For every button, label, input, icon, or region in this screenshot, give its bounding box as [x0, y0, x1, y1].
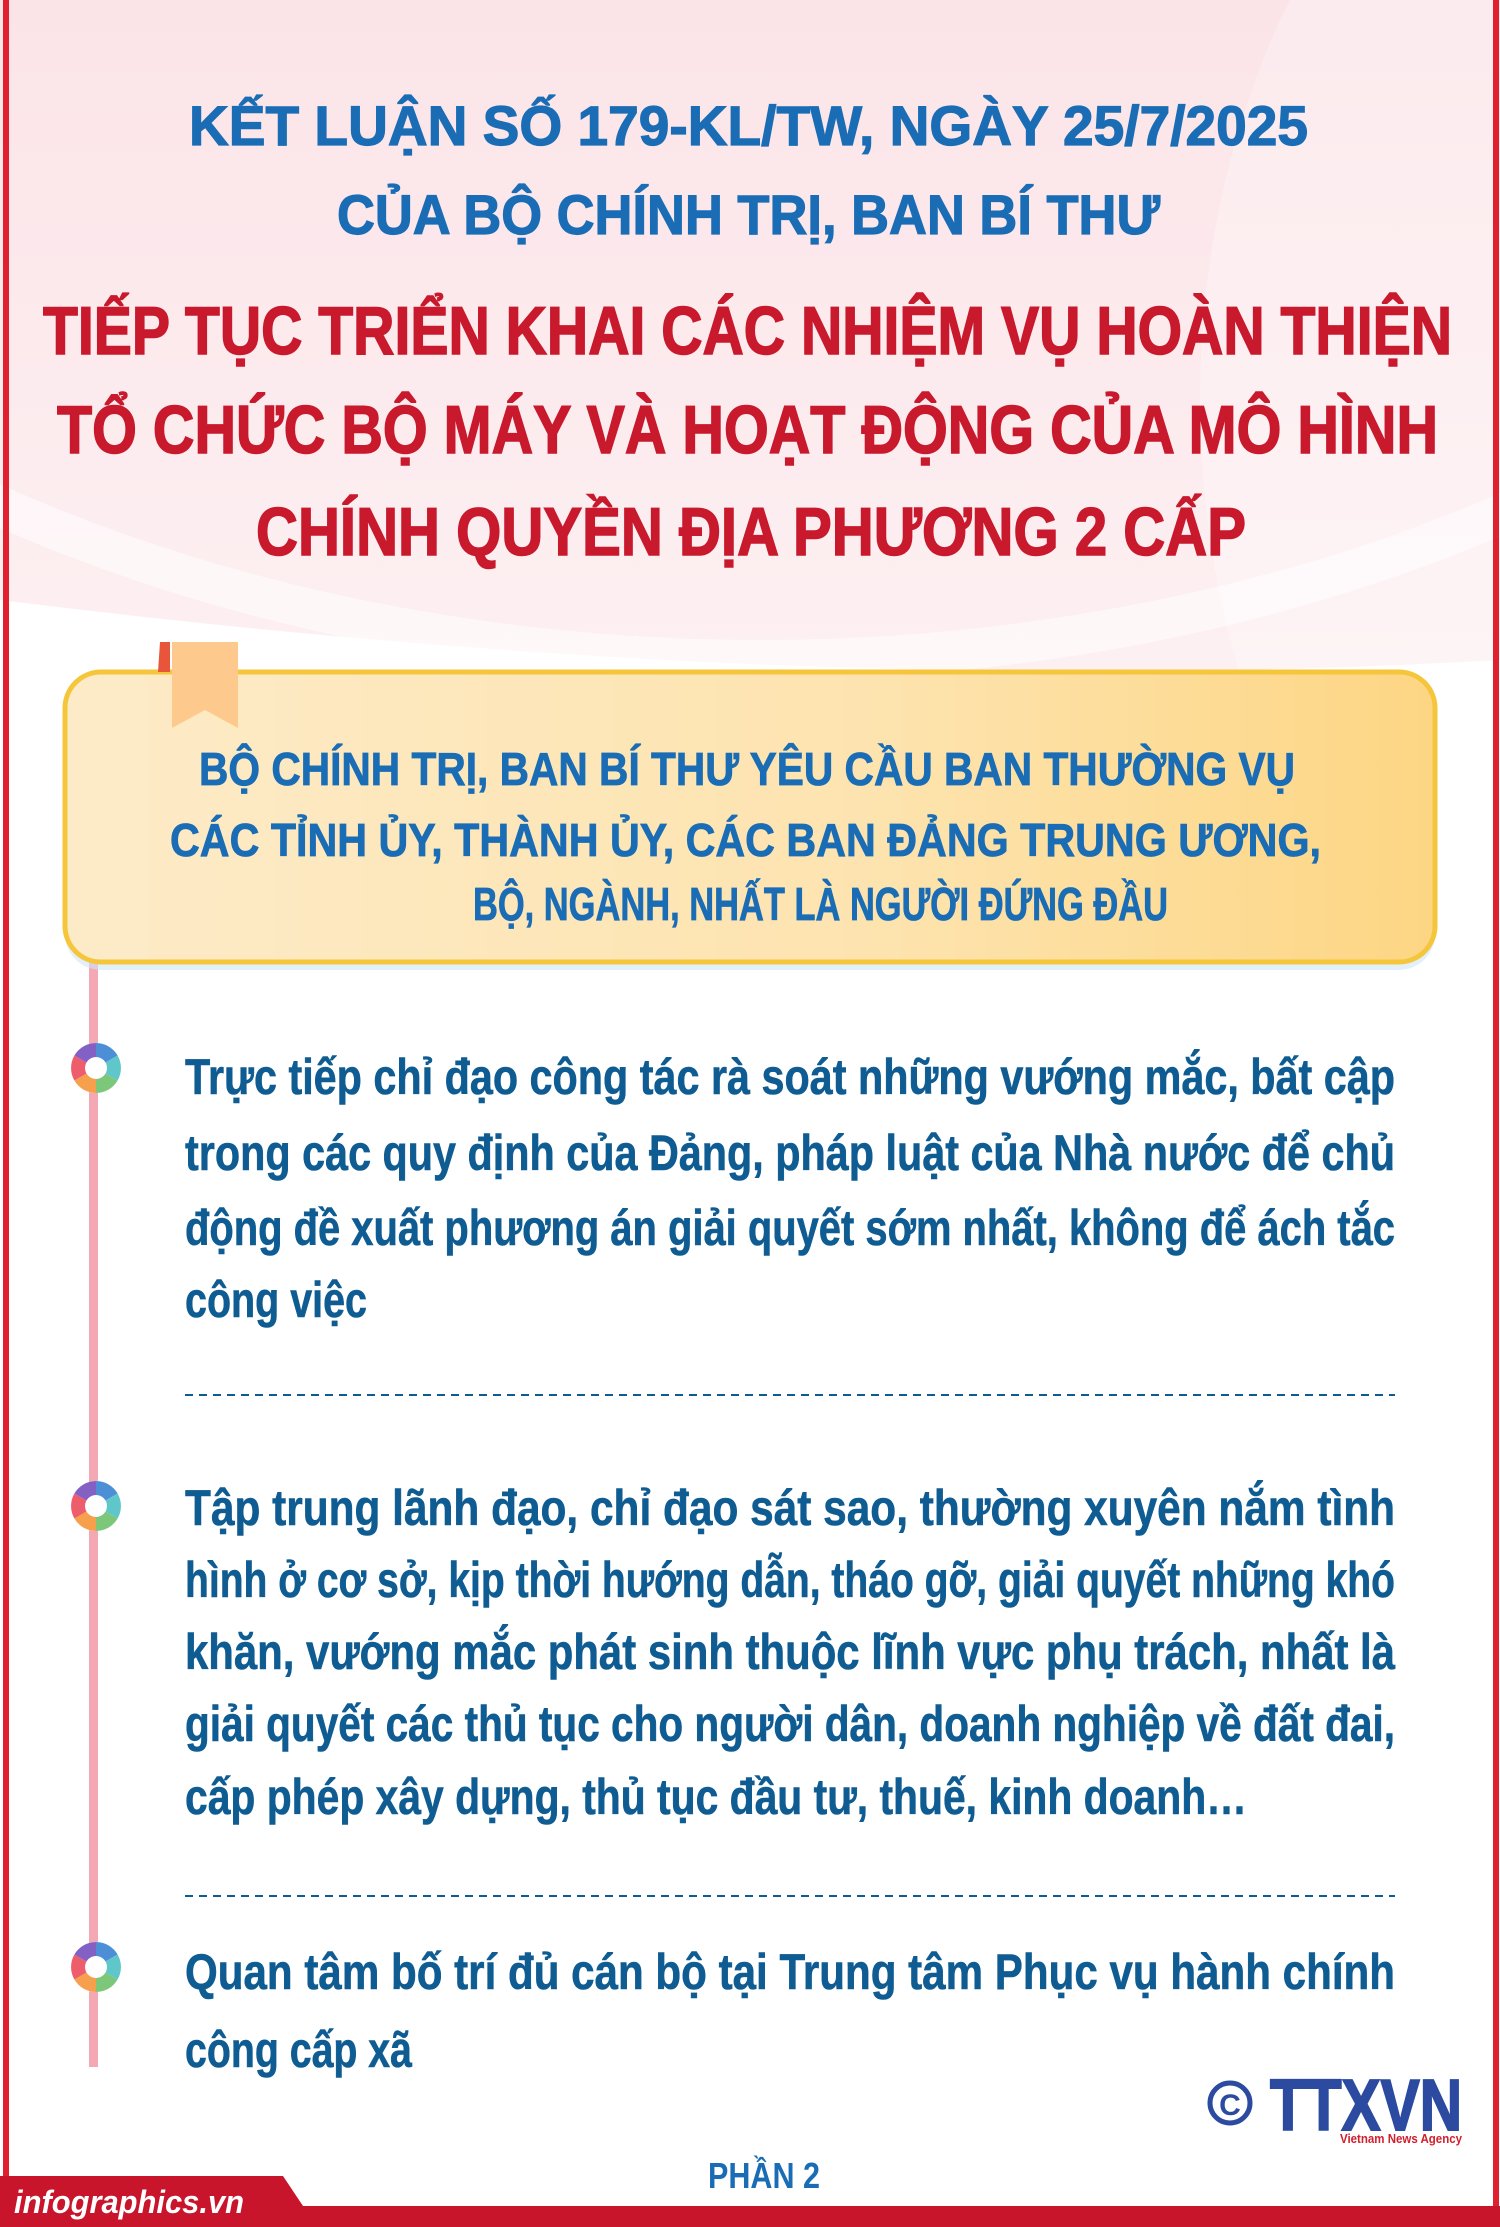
- icon: aperture 1: [71, 1043, 121, 1093]
- box text: CÁC TỈNH ỦY, THÀNH ỦY, CÁC BAN ĐẢNG TRUNG ƯƠNG,: [170, 814, 1321, 866]
- title: conclusion number: [189, 94, 1308, 246]
- title: conclusion number: CỦA BỘ CHÍNH TRỊ, BAN BÍ THƯ: [337, 183, 1161, 246]
- footer bar: [0, 2176, 1500, 2227]
- logo: TTXVN: [1210, 2066, 1463, 2146]
- icon: aperture 3: [71, 1942, 121, 1992]
- text block: item 1: công việc: [185, 1272, 367, 1328]
- logo: TTXVN: Vietnam News Agency: [1340, 2131, 1463, 2146]
- icon: aperture 2: [71, 1481, 121, 1531]
- text block: item 2: cấp phép xây dựng, thủ tục đầu tư, thuế, kinh doanh…: [185, 1769, 1247, 1825]
- text block: item 3: [185, 1944, 1395, 2078]
- footer bar: infographics.vn: [14, 2184, 244, 2220]
- panel: requirement box: [65, 642, 1435, 970]
- box text: BỘ, NGÀNH, NHẤT LÀ NGƯỜI ĐỨNG ĐẦU: [473, 878, 1168, 930]
- logo: TTXVN: TTXVN: [1270, 2066, 1462, 2146]
- footer label: part 2: PHẦN 2: [708, 2155, 820, 2196]
- title: conclusion number: KẾT LUẬN SỐ 179-KL/TW, NGÀY 25/7/2025: [189, 94, 1308, 157]
- text block: item 3: công cấp xã: [185, 2022, 412, 2078]
- icon: bookmark: [158, 642, 238, 728]
- logo: TTXVN: C: [1219, 2089, 1241, 2122]
- box text: [170, 743, 1321, 930]
- text block: item 1: [185, 1049, 1395, 1328]
- box text: BỘ CHÍNH TRỊ, BAN BÍ THƯ YÊU CẦU BAN THƯỜNG VỤ: [199, 743, 1295, 795]
- title: main red heading: CHÍNH QUYỀN ĐỊA PHƯƠNG 2 CẤP: [256, 493, 1246, 570]
- text block: item 2: [185, 1480, 1395, 1825]
- title: main red heading: [43, 292, 1452, 570]
- timeline line: [89, 960, 98, 2067]
